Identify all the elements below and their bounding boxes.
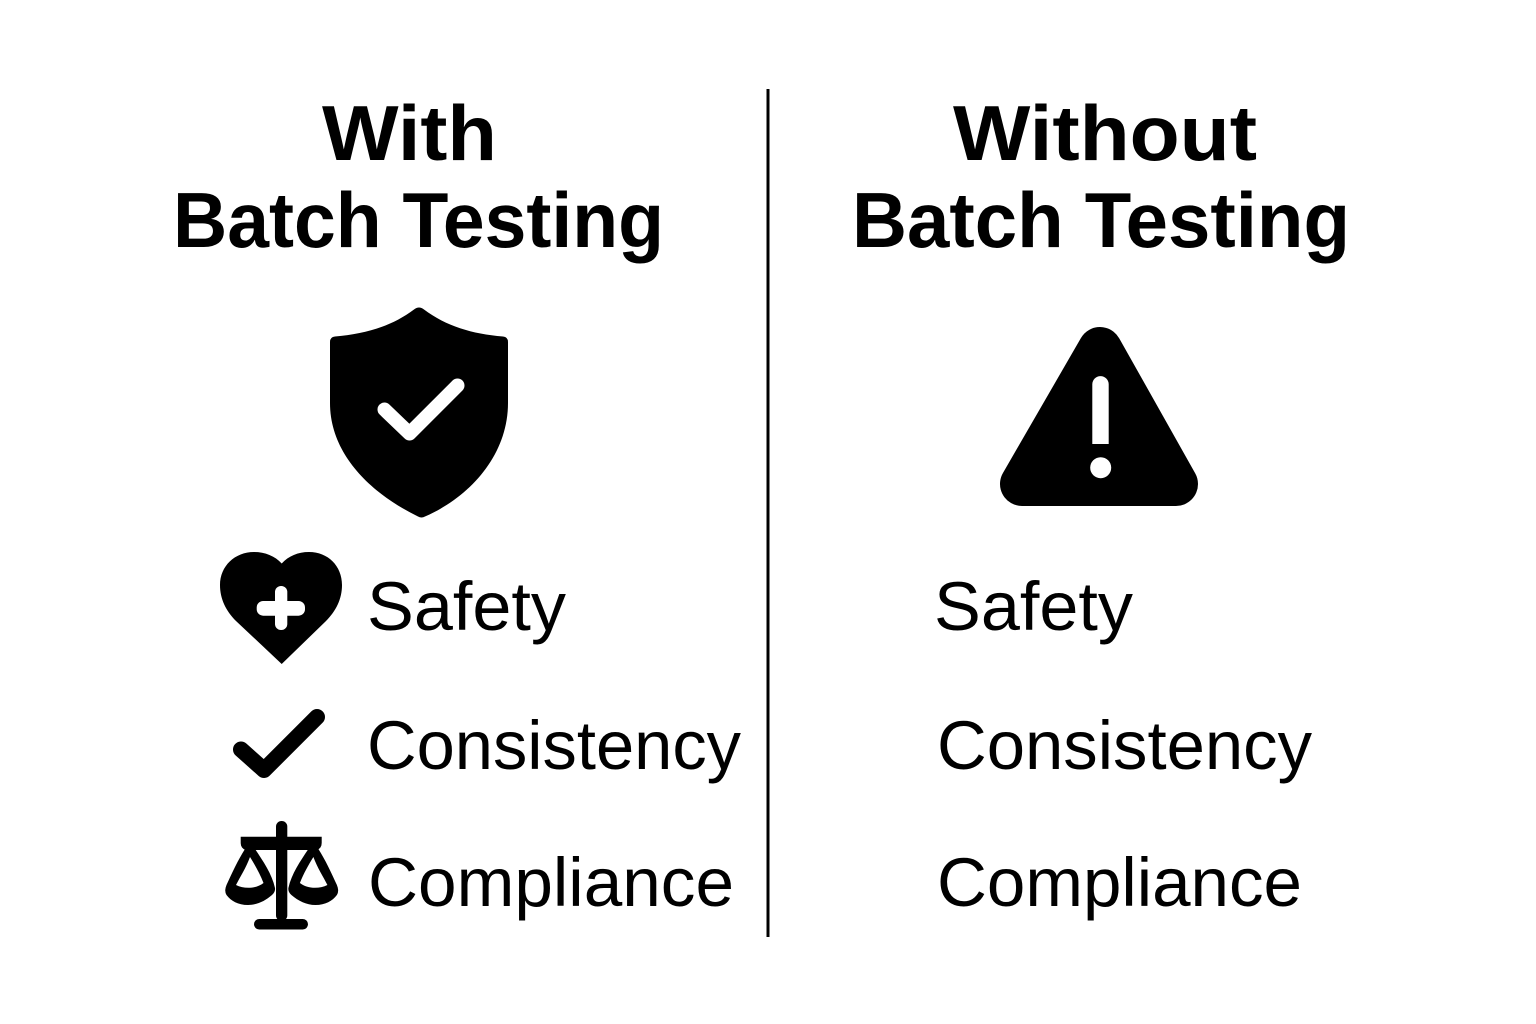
label: compliance: Compliance [937, 844, 1302, 921]
heading: without batch testing: Batch Testing [852, 176, 1350, 264]
label: consistency: Consistency [937, 707, 1312, 784]
icon: warning triangle [1022, 349, 1176, 484]
label: safety: Safety [367, 568, 566, 645]
left column: with batch testing [173, 89, 741, 930]
center divider [766, 89, 770, 937]
label: safety: Safety [934, 568, 1133, 645]
icon: balance scales [225, 821, 338, 930]
label: consistency: Consistency [367, 707, 741, 784]
icon: check mark [241, 717, 317, 770]
icon: shield with check [330, 308, 508, 518]
heading: with batch testing: Batch Testing [173, 176, 664, 264]
heading: without batch testing: Without [953, 89, 1257, 177]
heading: without batch testing [852, 89, 1350, 264]
heading: with batch testing [173, 89, 664, 264]
heading: with batch testing: With [322, 89, 497, 177]
right column: without batch testing [852, 89, 1350, 921]
icon: heart with plus [220, 552, 342, 664]
label: compliance: Compliance [368, 844, 734, 921]
